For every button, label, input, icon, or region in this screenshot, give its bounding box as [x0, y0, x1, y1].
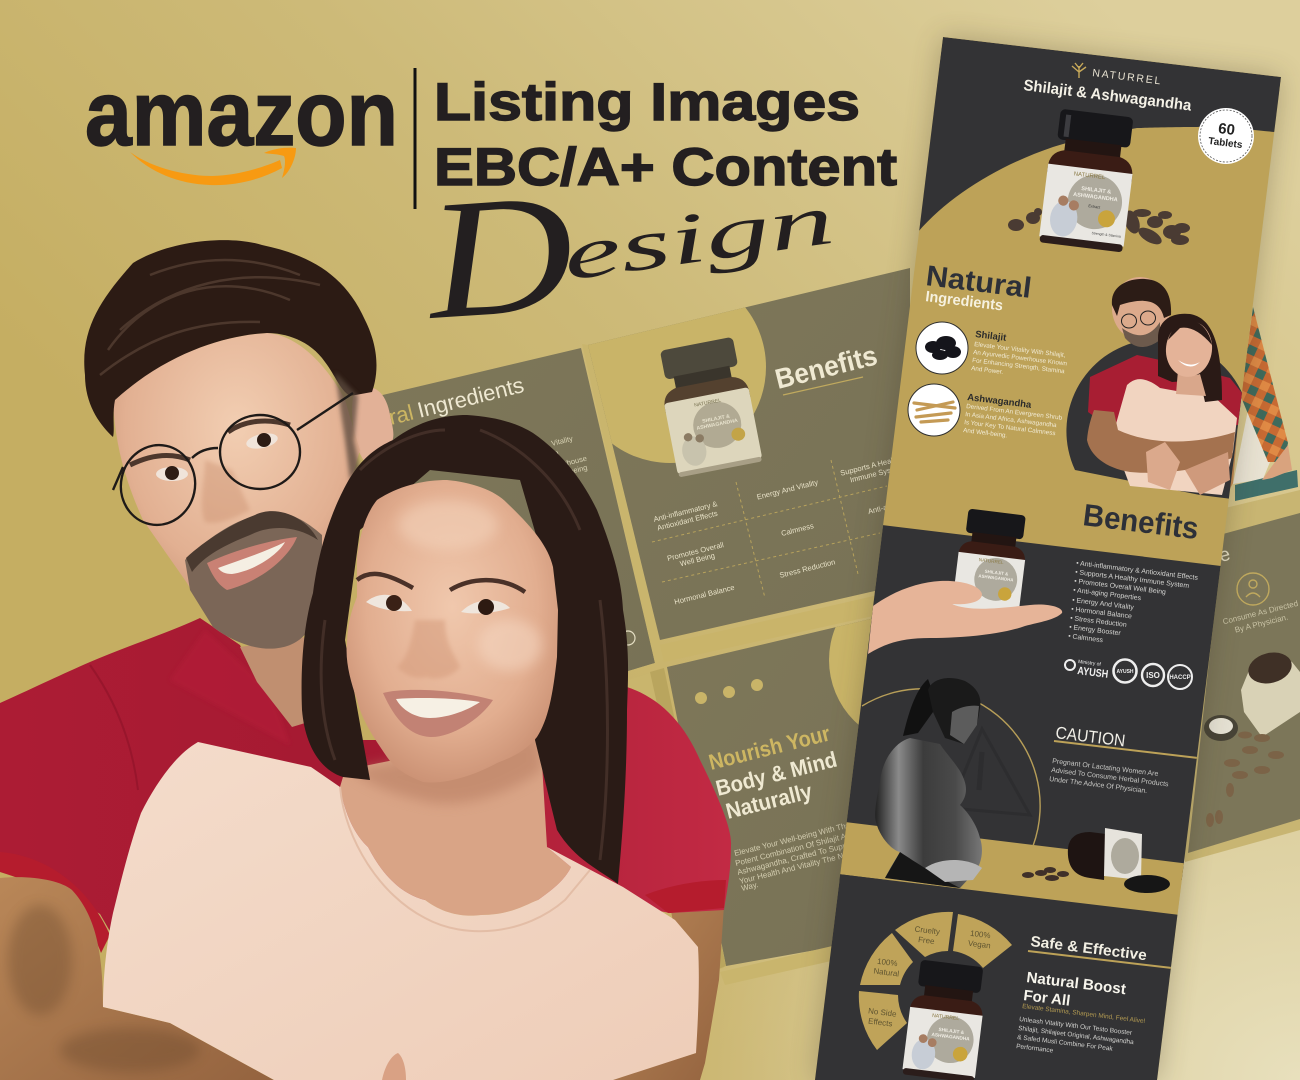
segment: no side effects — [859, 991, 907, 1050]
woman's neck — [340, 730, 571, 916]
certification logos: AYUSH — [1077, 665, 1109, 681]
paragraph: nourish — [733, 820, 864, 893]
gold arc — [862, 689, 1040, 846]
dashed benefit grid — [652, 460, 887, 598]
product bottle: SHILAJIT & — [702, 414, 731, 425]
couple photo — [0, 240, 731, 1080]
script word: Design: esign — [558, 179, 839, 296]
ingredient: Shilajit — [916, 322, 1068, 376]
benefit labels: Well Being — [679, 551, 716, 568]
text: consume directions: Consume As Directed — [1222, 599, 1299, 626]
segment: vegan — [953, 914, 1012, 968]
segment: cruelty free — [895, 912, 953, 957]
benefit list: • Hormonal Balance — [1071, 606, 1132, 620]
man's eyes and brows — [130, 421, 290, 481]
base gold — [800, 30, 1300, 1080]
text: consume directions: By A Physician. — [1234, 613, 1289, 635]
certification logos — [1065, 659, 1192, 689]
safe and effective block: Performance — [1016, 1043, 1054, 1055]
woman's mouth — [383, 690, 493, 737]
ingredient text fragments — [550, 434, 588, 476]
ingredient text fragments: Vitality — [550, 434, 574, 448]
man's near forearm — [0, 877, 274, 1080]
safe and effective block: Natural Boost — [1026, 969, 1127, 998]
man's sideburn — [335, 372, 360, 480]
product bottle: Strength & Stamina — [1091, 231, 1121, 239]
benefit labels — [653, 453, 904, 606]
paragraph: nourish: Way. — [740, 880, 759, 893]
icon: certification seal — [621, 631, 635, 645]
safe and effective block: Elevate Stamina, Sharpen Mind, Feel Alive! — [1022, 1003, 1146, 1025]
caution block: CAUTION — [1055, 723, 1126, 751]
benefit list: • Stress Reduction — [1070, 615, 1127, 629]
pregnant woman figure — [875, 678, 982, 888]
gold frame strip between back cards — [582, 344, 664, 672]
man's ear — [352, 387, 393, 462]
benefit labels: Energy And Vitality — [756, 478, 819, 502]
title: listing images — [434, 73, 897, 197]
heading: Natural Ingredients: Natural — [924, 260, 1033, 305]
product bottle: NATURREL — [1073, 171, 1106, 181]
section: dark lower area — [805, 873, 1180, 1080]
woman's nose — [397, 620, 460, 679]
man's face — [113, 333, 360, 647]
segment: cruelty free: Cruelty — [914, 925, 940, 937]
ingredient: Ashwagandha: Is Your Key To Natural Calmness — [964, 419, 1056, 437]
benefit list: • Energy And Vitality — [1072, 597, 1135, 612]
benefit labels: Calmness — [780, 521, 815, 538]
arm hair texture — [8, 905, 200, 1072]
certification logos: AYUSH — [1116, 669, 1134, 675]
man's nose shadow — [202, 460, 250, 523]
benefit labels: Antioxidant Effects — [656, 509, 719, 532]
caution block: Under The Advice Of Physician. — [1049, 776, 1148, 795]
product bottle: SHILAJIT & — [1081, 186, 1111, 196]
safe and effective block: Safe & Effective — [1030, 933, 1148, 964]
heading: nourish — [706, 721, 840, 824]
paragraph: nourish: Potent Combination Of Shilajit And — [734, 830, 856, 868]
product bottle lower: NATURREL — [932, 1013, 960, 1022]
beans beside bottle — [1008, 208, 1190, 248]
paragraph: nourish: Ashwagandha, Crafted To Support — [736, 838, 858, 877]
hair highlights — [321, 430, 608, 860]
benefit labels: Anti-inflammatory & — [653, 499, 718, 524]
gold circle — [829, 618, 872, 724]
product bottle — [1039, 108, 1139, 253]
heading: Natural Ingredients: Ingredients — [925, 288, 1004, 314]
panel: main listing — [800, 30, 1300, 1080]
forehead highlight — [398, 500, 498, 550]
bottle on hand — [868, 508, 1062, 654]
product bottle lower — [902, 959, 988, 1080]
title: Shilajit & Ashwagandha — [1023, 77, 1193, 115]
bottle on hand: NATURREL — [979, 557, 1004, 565]
heading: nourish: Nourish Your — [706, 721, 833, 775]
man's glasses — [113, 393, 353, 532]
benefit list: • Anti-inflammatory & Antioxidant Effects — [1076, 560, 1199, 582]
title: listing images: Listing Images — [434, 73, 860, 132]
woman's hair — [302, 415, 628, 884]
ingredient: Ashwagandha: Derived From An Evergreen Shrub — [966, 403, 1063, 422]
benefit labels: Immune System — [849, 463, 904, 484]
paragraph: nourish: Elevate Your Well-being With The — [733, 820, 851, 858]
heading: Benefits: Benefits — [772, 340, 880, 395]
ingredient: Ashwagandha: Ashwagandha — [967, 392, 1033, 411]
product bottle: ASHWAGANDHA — [696, 418, 739, 432]
benefit labels: Promotes Overall — [666, 540, 725, 563]
caution block — [1049, 723, 1198, 795]
certification logos: ISO — [1146, 671, 1160, 680]
benefit wheel — [859, 912, 1012, 1050]
mini couple photo — [1087, 273, 1242, 495]
woman's thumb — [382, 1053, 406, 1080]
badge: 60 tablets: Tablets — [1208, 136, 1243, 151]
logo: amazon: amazon — [85, 63, 398, 165]
cheek highlight — [478, 619, 542, 671]
panel: back right consume card — [1170, 490, 1300, 862]
benefit list: • Supports A Healthy Immune System — [1075, 569, 1190, 590]
man's mouth — [207, 537, 297, 590]
certification logos: Ministry of — [1078, 659, 1102, 668]
shadow of main listing panel — [815, 37, 1281, 1080]
ingredient: Shilajit: An Ayurvedic Powerhouse Known — [973, 349, 1068, 368]
benefit list: • Promotes Overall Well Being — [1074, 578, 1166, 596]
ingredient: Shilajit: For Enhancing Strength, Stamina — [972, 357, 1066, 375]
dark circle behind couple — [1066, 339, 1250, 500]
benefit list — [1068, 560, 1199, 644]
title: listing images: EBC/A+ Content — [434, 138, 897, 197]
segment: vegan: 100% — [970, 929, 991, 940]
gold band: caution base — [830, 822, 1190, 916]
product bottle — [654, 336, 763, 478]
bottle on hand: SHILAJIT & — [985, 569, 1009, 577]
man's beard — [185, 512, 322, 649]
benefit list: • Energy Booster — [1069, 624, 1122, 637]
beard dark — [186, 511, 318, 572]
panel: nourish card — [650, 618, 872, 984]
safe and effective block: Unleash Vitality With Our Testo Booster — [1019, 1016, 1133, 1037]
brand logo — [1072, 62, 1160, 84]
brand logo: NATURREL — [1092, 67, 1163, 88]
panel: back right lifestyle photo with plaid shirt — [1224, 307, 1298, 501]
benefit labels: Hormonal Balance — [673, 583, 735, 606]
divider — [414, 68, 416, 209]
heading: Benefits: Benefits — [1081, 497, 1201, 546]
woman's brows and eyes — [357, 574, 525, 615]
man's red polo — [0, 618, 731, 953]
ingredient: Shilajit: Shilajit — [975, 329, 1008, 344]
gold strip below benefits card — [660, 590, 900, 662]
certification logos: HACCP — [1169, 675, 1191, 681]
benefit list: • Calmness — [1068, 633, 1104, 644]
script word: Design: D — [419, 157, 579, 355]
segment: natural: Natural — [873, 966, 900, 979]
man's neck — [240, 635, 320, 727]
benefit list: • Anti-aging Properties — [1073, 587, 1142, 602]
ingredient text fragments: being — [568, 463, 588, 476]
ingredient text fragments: rhouse — [563, 454, 588, 468]
heading: ralIngredients — [386, 372, 526, 430]
icon: physician — [1237, 573, 1269, 605]
product bottle: Extract — [1088, 204, 1101, 210]
safe and effective block: & Safed Musli Combine For Peak — [1017, 1034, 1114, 1053]
ingredient: Ashwagandha: And Well-being. — [963, 427, 1008, 439]
panel: benefits card — [574, 268, 910, 640]
gold circle — [588, 308, 766, 463]
product bottle lower: SHILAJIT & — [938, 1027, 965, 1036]
segment: natural — [860, 933, 913, 985]
caution block: Advised To Consume Herbal Products — [1051, 767, 1169, 788]
product bottle: ASHWAGANDHA — [1073, 192, 1118, 203]
segment: vegan: Vegan — [967, 939, 991, 950]
icon: open jar with beans — [1204, 648, 1300, 827]
ingredient: Shilajit: Elevate Your Vitality With Shilajit, — [974, 341, 1066, 359]
benefit labels: Supports A Healthy — [839, 453, 904, 478]
script word: Design — [419, 157, 839, 355]
woman's t-shirt — [103, 742, 699, 1080]
icon: tree — [1072, 63, 1086, 78]
segment: natural: 100% — [877, 957, 898, 968]
ingredient: Ashwagandha — [908, 384, 1063, 439]
hand — [868, 581, 1062, 654]
hair strands — [100, 260, 320, 375]
badge: 60 tablets — [1198, 108, 1254, 164]
section: dark header with curve — [918, 37, 1281, 232]
three dots — [695, 679, 763, 704]
heading fragment: e — [1217, 544, 1232, 567]
man's far forearm — [610, 905, 724, 1080]
segment: cruelty free: Free — [918, 935, 936, 946]
segment: no side effects: Effects — [868, 1017, 893, 1028]
panel: natural ingredients card — [370, 348, 655, 700]
product bottle lower: ASHWAGANDHA — [931, 1032, 971, 1043]
underline — [783, 377, 863, 395]
icon: warning triangle — [950, 729, 1030, 815]
bottle on hand: ASHWAGANDHA — [978, 573, 1015, 583]
woman's neck shadow — [350, 735, 542, 804]
product bottle: NATURREL — [694, 398, 722, 409]
ingredient: Ashwagandha: In Asia And Africa, Ashwagandha — [965, 411, 1057, 429]
safe and effective block: For All — [1023, 987, 1071, 1010]
ingredient text fragments: n — [553, 448, 560, 458]
benefit labels: Stress Reduction — [779, 557, 836, 580]
safe and effective block — [1016, 933, 1172, 1055]
heading: nourish: Naturally — [723, 778, 815, 824]
icon: ashwagandha roots — [908, 384, 960, 436]
icon: shilajit lumps — [916, 322, 968, 374]
man's hair — [84, 240, 376, 437]
woman's face — [347, 480, 558, 783]
section: dark benefits area — [830, 525, 1221, 880]
ingredient: Shilajit: And Power. — [971, 365, 1004, 376]
segment: no side effects: No Side — [868, 1006, 898, 1019]
caution block: Pregnant Or Lactating Women Are — [1052, 758, 1159, 778]
paragraph: nourish: Your Health And Vitality The Natural — [738, 846, 864, 886]
icon: amazon smile arrow — [130, 148, 296, 185]
spilled bottle with beans — [1022, 828, 1170, 893]
badge: 60 tablets: 60 — [1217, 120, 1236, 139]
benefit labels: Anti-aging — [867, 499, 902, 516]
safe and effective block: Shilajit, Shilajeet Original, Ashwagandha — [1018, 1025, 1134, 1046]
heading: nourish: Body & Mind — [713, 747, 840, 801]
